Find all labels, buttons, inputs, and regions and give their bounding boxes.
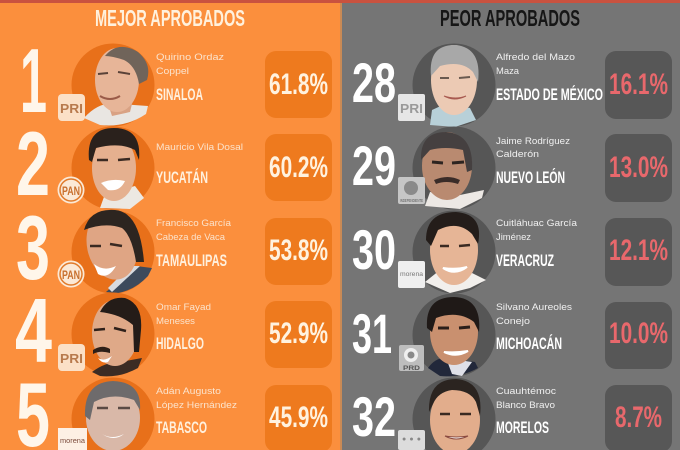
logo: morena: morena xyxy=(400,271,423,278)
row 29: Nuevo León: NUEVO LEÓN xyxy=(496,168,565,187)
portrait 31 xyxy=(427,297,479,376)
row 4: Hidalgo xyxy=(15,281,332,382)
heading: mejor aprobados: MEJOR APROBADOS xyxy=(95,5,245,31)
row 31: Michoacán: 31 xyxy=(352,302,392,365)
top strip xyxy=(0,0,680,3)
logo: morena: morena xyxy=(60,436,86,445)
logo: PRI: PRI xyxy=(60,101,83,116)
row 29: Nuevo León: Jaime Rodríguez xyxy=(496,136,570,147)
row 1: Sinaloa: Quirino Ordaz xyxy=(156,52,224,63)
row 28: Estado de México: Alfredo del Mazo xyxy=(496,52,575,63)
row 5: Tabasco: Adán Augusto xyxy=(156,386,221,397)
row 32: Morelos: Cuauhtémoc xyxy=(496,386,556,397)
row 32: Morelos: 32 xyxy=(352,385,396,448)
row 2: Yucatán: YUCATÁN xyxy=(156,168,208,187)
logo: PAN: PAN xyxy=(62,184,80,198)
row 31: Michoacán: MICHOACÁN xyxy=(496,334,562,353)
row 31: Michoacán xyxy=(352,294,672,376)
row 1: Sinaloa: 61.8% xyxy=(269,68,328,101)
row 4: Hidalgo: 52.9% xyxy=(269,317,328,350)
row 28: Estado de México: ESTADO DE MÉXICO xyxy=(496,85,603,104)
row 2: Yucatán: 2 xyxy=(16,114,50,215)
portrait 4 xyxy=(92,298,142,376)
panel: peor aprobados xyxy=(340,0,680,450)
portrait 5 xyxy=(85,381,140,450)
row 30: Veracruz: Jiménez xyxy=(496,232,531,243)
logo: independiente: INDEPENDIENTE xyxy=(400,198,423,203)
logo: PRD: PRD xyxy=(403,366,421,372)
row 3: Tamaulipas: 53.8% xyxy=(269,234,328,267)
logo: PRD xyxy=(399,345,424,372)
logo: Partido Encuentro Social: ●●● xyxy=(402,436,421,443)
row 28: Estado de México: 28 xyxy=(352,51,396,114)
row 30: Veracruz: 30 xyxy=(352,218,396,281)
row 30: Veracruz: Cuitláhuac García xyxy=(496,218,578,229)
row 3: Tamaulipas: Francisco García xyxy=(156,218,232,229)
row 30: Veracruz xyxy=(352,210,672,294)
logo: PRI xyxy=(58,344,85,371)
row 5: Tabasco xyxy=(16,365,332,450)
row 3: Tamaulipas: Cabeza de Vaca xyxy=(156,232,226,243)
row 32: Morelos: MORELOS xyxy=(496,419,549,437)
row 28: Estado de México xyxy=(352,44,672,127)
row 4: Hidalgo: HIDALGO xyxy=(156,335,204,353)
portrait 1 xyxy=(84,47,148,126)
row 5: Tabasco: TABASCO xyxy=(156,419,207,437)
row 30: Veracruz: VERACRUZ xyxy=(496,252,554,270)
row 2: Yucatán xyxy=(16,114,332,215)
row 5: Tabasco: López Hernández xyxy=(156,400,237,411)
row 1: Sinaloa: Coppel xyxy=(156,66,189,77)
row 29: Nuevo León: Calderón xyxy=(496,149,539,160)
row 5: Tabasco: 45.9% xyxy=(269,401,328,434)
portrait 32 xyxy=(429,379,480,450)
logo: Partido Encuentro Social xyxy=(398,430,425,450)
portrait 29 xyxy=(421,132,484,209)
row 4: Hidalgo: Meneses xyxy=(156,316,195,327)
row 1: Sinaloa: SINALOA xyxy=(156,86,203,104)
logo: morena xyxy=(58,428,87,450)
logo: PRI: PRI xyxy=(400,101,423,116)
row 1: Sinaloa: 1 xyxy=(20,31,47,132)
panel: mejor aprobados xyxy=(0,0,340,450)
row 28: Estado de México: Maza xyxy=(496,66,520,77)
row 3: Tamaulipas xyxy=(16,198,332,299)
logo: PRI: PRI xyxy=(60,351,83,366)
logo: PRI xyxy=(58,94,85,121)
row 29: Nuevo León xyxy=(352,126,672,210)
portrait 28 xyxy=(430,45,479,127)
logo: PRI xyxy=(398,94,425,121)
logo: morena xyxy=(398,261,425,288)
row 2: Yucatán: Mauricio Vila Dosal xyxy=(156,142,243,153)
logo: PAN: PAN xyxy=(62,268,80,282)
logo: independiente xyxy=(398,177,425,204)
row 4: Hidalgo: 4 xyxy=(15,281,52,382)
heading: peor aprobados: PEOR APROBADOS xyxy=(440,5,580,31)
row 3: Tamaulipas: 3 xyxy=(16,198,50,299)
row 31: Michoacán: Conejo xyxy=(496,316,530,327)
row 31: Michoacán: Silvano Aureoles xyxy=(496,302,572,313)
logo: PAN xyxy=(58,260,84,288)
portrait 30 xyxy=(425,212,486,293)
row 2: Yucatán: 60.2% xyxy=(269,151,328,184)
row 32: Morelos xyxy=(352,378,672,450)
portrait 3 xyxy=(80,206,152,293)
row 29: Nuevo León: 29 xyxy=(352,134,396,197)
row 4: Hidalgo: Omar Fayad xyxy=(156,302,211,313)
row 3: Tamaulipas: TAMAULIPAS xyxy=(156,252,227,270)
portrait 2 xyxy=(89,128,144,209)
row 32: Morelos: Blanco Bravo xyxy=(496,400,555,411)
row 1: Sinaloa xyxy=(20,31,332,132)
logo: PAN xyxy=(58,176,84,204)
